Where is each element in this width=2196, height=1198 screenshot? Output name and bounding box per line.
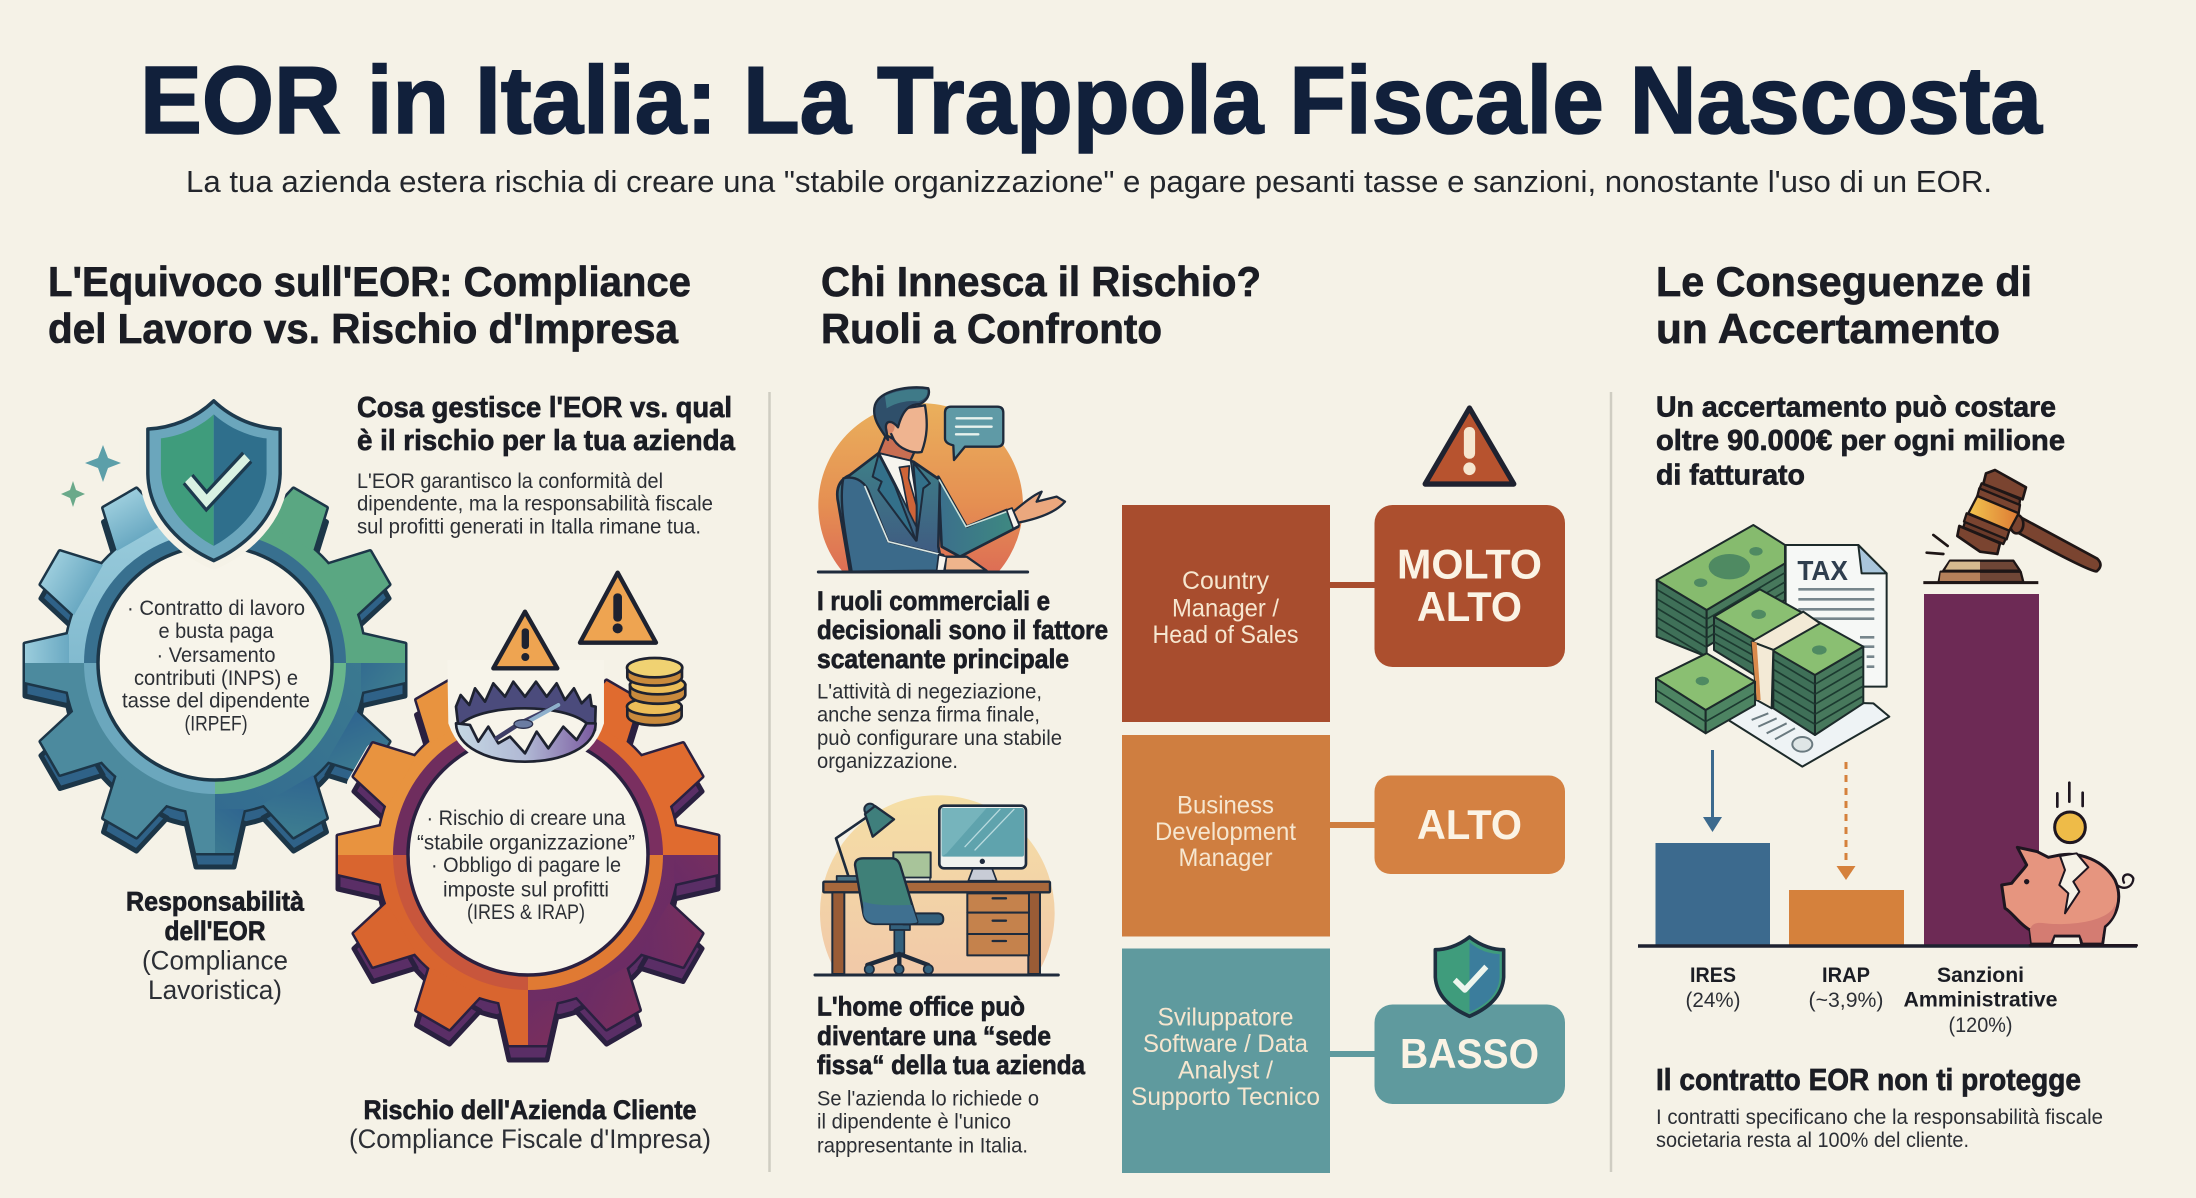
- risk row: low: Sviluppatore: [1158, 1004, 1294, 1032]
- panel: column 1 intro text: dipendente, ma la responsabilità fiscale: [357, 492, 713, 516]
- text: EOR contract does not protect: I contratti specificano che la responsabilità fiscale: [1656, 1106, 2103, 1129]
- text: commercial roles: [817, 586, 1108, 773]
- risk row: very high: Country: [1182, 567, 1269, 595]
- panel: column 1 intro text: Cosa gestisce l'EOR vs. qual: [357, 392, 732, 424]
- text: commercial roles: decisionali sono il fattore: [817, 615, 1108, 645]
- gear 1 text: [122, 597, 310, 736]
- icon: gavel: [1923, 470, 2100, 583]
- risk row: high: Development: [1155, 818, 1296, 846]
- icon: sparkles: [61, 445, 121, 507]
- text: commercial roles: L'attività di negeziazione,: [817, 680, 1042, 704]
- text: EOR contract does not protect: Il contratto EOR non ti protegge: [1656, 1062, 2081, 1097]
- text: home office: fissa“ della tua azienda: [817, 1050, 1086, 1080]
- panel: column 1 intro text: [357, 392, 736, 538]
- text: home office: il dipendente è l'unico: [817, 1110, 1011, 1134]
- gear 2 text: imposte sul profitti: [443, 878, 609, 902]
- gear 1 text: · Contratto di lavoro: [127, 597, 305, 620]
- gear: EOR responsibility: [25, 473, 405, 867]
- text: home office: Se l'azienda lo richiede o: [817, 1088, 1039, 1110]
- heading: column 2: [821, 258, 1261, 352]
- bar chart: Amministrative: [1904, 988, 2058, 1012]
- icon: coin stack: [627, 658, 685, 725]
- bar chart: [1638, 594, 2137, 1037]
- text: cost headline: Un accertamento può costare: [1656, 392, 2056, 424]
- risk row: very high: Manager /: [1172, 594, 1279, 622]
- bar chart: Sanzioni: [1937, 964, 2024, 987]
- text: home office: L'home office può: [817, 992, 1025, 1022]
- bar chart: (~3,9%): [1808, 989, 1884, 1012]
- risk row: very high: [1122, 505, 1565, 722]
- gear 1 text: · Versamento: [156, 644, 276, 667]
- title: EOR in Italia: La Trappola Fiscale Nascosta: [140, 47, 2043, 154]
- text: commercial roles: scatenante principale: [817, 644, 1069, 674]
- heading: column 1: del Lavoro vs. Rischio d'Impresa: [48, 305, 679, 352]
- heading: column 2: Chi Innesca il Rischio?: [821, 258, 1261, 305]
- risk row: high: ALTO: [1417, 801, 1522, 848]
- panel: column 1 intro text: sul profitti generati in Italla rimane tua.: [357, 516, 701, 538]
- gear 2 text: “stabile organizzazione”: [417, 832, 635, 854]
- text: commercial roles: anche senza firma finale,: [817, 704, 1040, 726]
- risk row: very high: MOLTO: [1397, 540, 1542, 588]
- risk row: low: Software / Data: [1143, 1030, 1308, 1058]
- text: commercial roles: può configurare una stabile: [817, 727, 1062, 750]
- bar chart: IRES: [1690, 964, 1736, 987]
- icon: warning: [1425, 408, 1514, 484]
- text: EOR contract does not protect: societaria resta al 100% del cliente.: [1656, 1129, 1969, 1152]
- heading: column 2: Ruoli a Confronto: [821, 305, 1162, 352]
- heading: column 3: Le Conseguenze di: [1656, 258, 2032, 305]
- risk row: high: Manager: [1178, 844, 1272, 872]
- label: EOR responsibility: dell'EOR: [164, 916, 266, 946]
- icon: money stacks and tax document: [1656, 525, 1889, 767]
- risk row: low: [1122, 948, 1565, 1173]
- icon: shield with check: [148, 401, 280, 561]
- text: cost headline: oltre 90.000€ per ogni milione: [1656, 425, 2065, 457]
- gear 2 text: · Obbligo di pagare le: [431, 854, 621, 877]
- illustration: businessman: [818, 387, 1065, 572]
- panel: column 1 intro text: è il rischio per la tua azienda: [357, 425, 736, 457]
- text: EOR contract does not protect: [1656, 1062, 2103, 1152]
- label: EOR responsibility: Lavoristica): [148, 975, 282, 1005]
- heading: column 1: L'Equivoco sull'EOR: Compliance: [48, 258, 691, 305]
- text: cost headline: [1656, 392, 2065, 492]
- heading: column 1: [48, 258, 691, 352]
- gear 1 text: e busta paga: [158, 620, 274, 643]
- bar chart: (24%): [1686, 989, 1740, 1012]
- risk row: low: BASSO: [1400, 1030, 1539, 1077]
- heading: column 3: [1656, 258, 2032, 352]
- illustration: home office desk: [815, 795, 1058, 975]
- risk row: low: Supporto Tecnico: [1131, 1083, 1320, 1111]
- icon: broken piggy bank with coin: [2002, 783, 2137, 945]
- gear: client company risk: [338, 665, 718, 1060]
- label: EOR responsibility: [126, 886, 305, 1005]
- icon: small shield: [1435, 937, 1504, 1016]
- bar chart: IRAP: [1822, 964, 1870, 987]
- icon: money stacks and tax document: TAX: [1797, 555, 1848, 586]
- risk row: high: Business: [1177, 792, 1274, 820]
- gear 1 text: contributi (INPS) e: [134, 667, 298, 690]
- icon: warning triangles: [493, 573, 656, 668]
- arrow: to IRAP bar: [1836, 762, 1856, 880]
- label: EOR responsibility: Responsabilità: [126, 886, 305, 916]
- gear 1 text: tasse del dipendente: [122, 690, 310, 712]
- text: commercial roles: I ruoli commerciali e: [817, 586, 1050, 616]
- gear 2 text: · Rischio di creare una: [426, 807, 626, 830]
- label: client company risk: (Compliance Fiscale d'Impresa): [349, 1124, 711, 1154]
- label: client company risk: [349, 1095, 711, 1154]
- text: home office: [817, 992, 1086, 1158]
- subtitle: La tua azienda estera rischia di creare una "stabile organizzazione" e pagare pesanti tasse e sanzioni, nonostante l'uso di un EOR.: [186, 164, 1992, 199]
- label: client company risk: Rischio dell'Azienda Cliente: [364, 1095, 696, 1125]
- gear 2 text: [417, 807, 635, 924]
- arrow: to IRES bar: [1703, 750, 1722, 832]
- gear 1 text: (IRPEF): [184, 712, 248, 736]
- text: home office: diventare una “sede: [817, 1021, 1051, 1051]
- gear 2 text: (IRES & IRAP): [467, 901, 585, 924]
- panel: column 1 intro text: L'EOR garantisco la conformità del: [357, 470, 663, 493]
- risk row: high: [1122, 735, 1565, 936]
- text: cost headline: di fatturato: [1656, 460, 1805, 492]
- icon: bear trap: [447, 660, 604, 768]
- risk row: very high: Head of Sales: [1152, 621, 1298, 649]
- text: commercial roles: organizzazione.: [817, 750, 958, 773]
- heading: column 3: un Accertamento: [1656, 305, 2000, 352]
- risk row: very high: ALTO: [1417, 583, 1522, 630]
- bar chart: (120%): [1948, 1014, 2012, 1037]
- label: EOR responsibility: (Compliance: [142, 946, 288, 976]
- text: home office: rappresentante in Italia.: [817, 1134, 1028, 1158]
- risk row: low: Analyst /: [1178, 1056, 1273, 1084]
